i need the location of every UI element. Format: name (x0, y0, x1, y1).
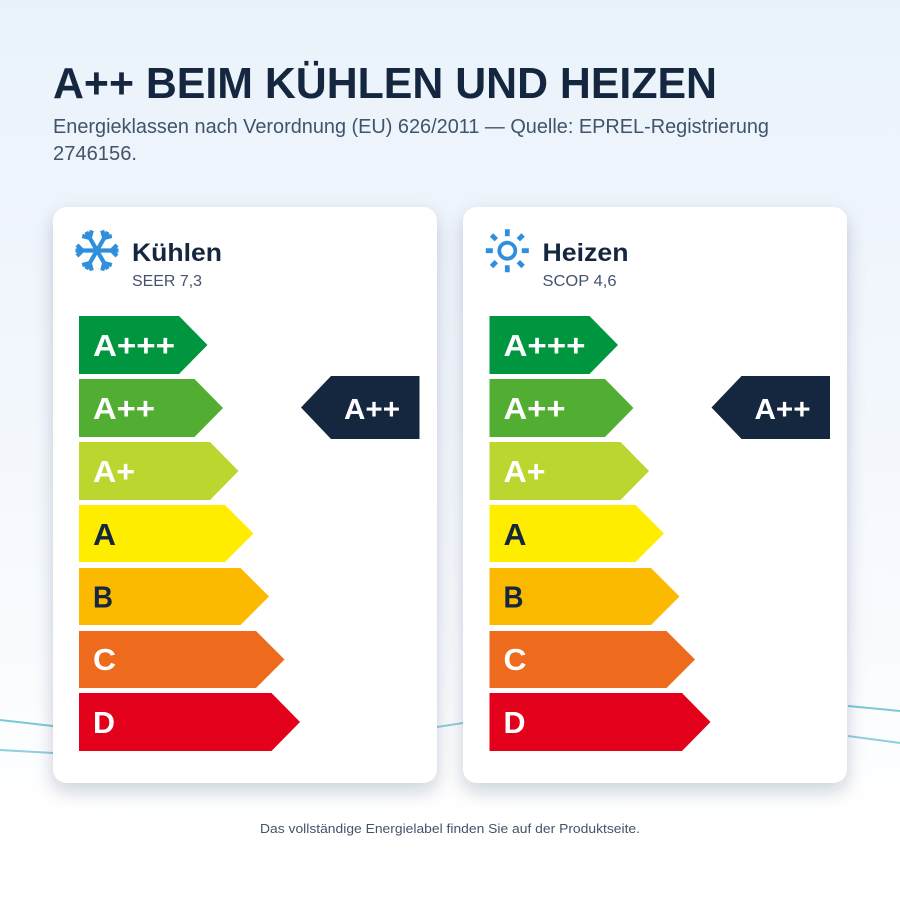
rating pointer: A++ (712, 376, 830, 439)
bar: D: D (504, 705, 526, 740)
bar: A+ (79, 442, 238, 500)
energy scale: Heizen (490, 316, 710, 751)
label: SCOP 4,6: SCOP 4,6 (542, 273, 617, 290)
rating pointer: A++: A++ (344, 394, 400, 426)
bar: A+: A+ (93, 454, 135, 489)
bar: A+++ (490, 316, 618, 374)
bar: A++: A++ (504, 391, 566, 426)
heading: Heizen: Heizen (542, 239, 628, 267)
bar: C (490, 631, 695, 688)
panel: Heizen (463, 207, 847, 783)
rating pointer: A++ (301, 376, 420, 439)
bar: C (79, 631, 284, 688)
icon: sun (486, 229, 529, 272)
bar: C: C (504, 642, 526, 677)
bar: A+++ (79, 316, 208, 374)
title: A++ BEIM KÜHLEN UND HEIZEN (53, 59, 717, 108)
bar: D (490, 693, 710, 751)
bar: A++ (79, 379, 223, 437)
icon: snowflake (76, 229, 118, 272)
bar: B: B (93, 580, 113, 614)
footer note: Das vollständige Energielabel finden Sie auf der Produktseite. (260, 821, 640, 836)
bar: B: B (504, 580, 524, 614)
bar: A+: A+ (504, 454, 546, 489)
heading: Kühlen: Kühlen (132, 239, 222, 267)
rating pointer: A++: A++ (754, 394, 810, 426)
energy scale: Kühlen (79, 316, 300, 751)
bar: D: D (93, 705, 115, 740)
bar: D (79, 693, 300, 751)
bar: C: C (93, 642, 116, 677)
bar: B (79, 568, 269, 625)
subtitle: 2746156. (53, 143, 137, 165)
bar: A: A (504, 517, 526, 552)
label: SEER 7,3: SEER 7,3 (132, 273, 202, 290)
subtitle: Energieklassen nach Verordnung (EU) 626/2011 — Quelle: EPREL-Registrierung (53, 116, 769, 138)
bar: A++: A++ (93, 391, 155, 426)
bar: A: A (93, 517, 116, 552)
bar: A+++: A+++ (504, 328, 586, 363)
subtitle (53, 116, 769, 165)
bar: A (490, 505, 664, 562)
bar: A (79, 505, 254, 562)
bar: B (490, 568, 680, 625)
bar: A++ (490, 379, 634, 437)
bar: A+++: A+++ (93, 328, 175, 363)
bar: A+ (490, 442, 649, 500)
panel: Kühlen (53, 207, 437, 783)
